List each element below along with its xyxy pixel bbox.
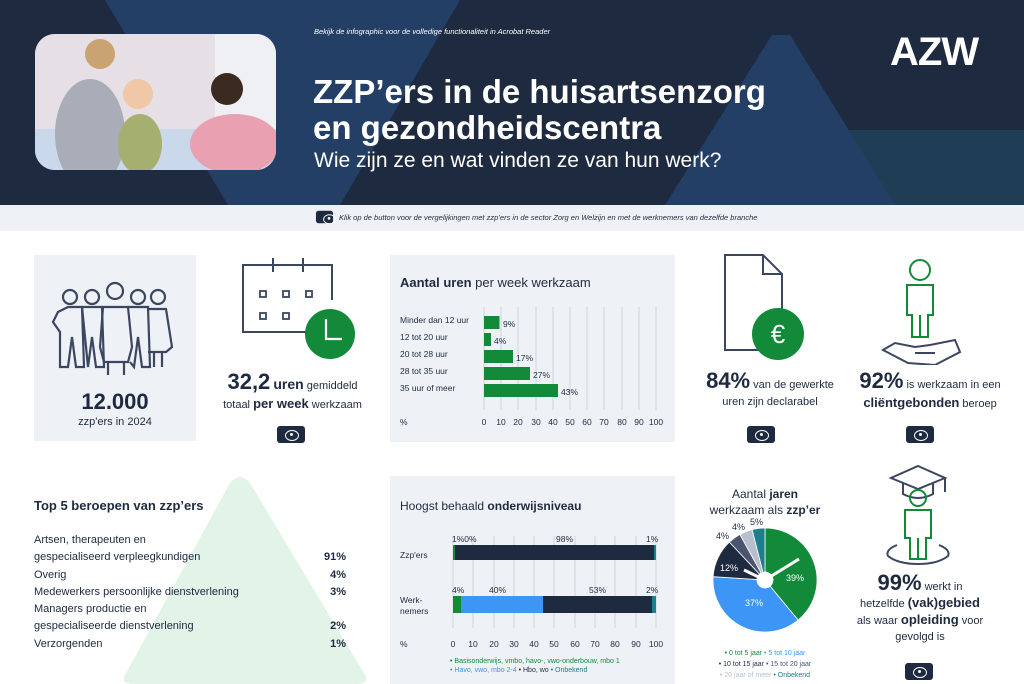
list of occupations: 91% (324, 551, 346, 563)
icon: person on hand (881, 259, 962, 365)
panel: pie chart years: 4% (716, 531, 729, 541)
panel: bar chart hours: 30 (531, 417, 541, 427)
panel: onderwijsniveau chart: 2% (646, 585, 659, 595)
panel: pie chart years: 4% (732, 522, 745, 532)
panel: bar chart hours: 28 tot 35 uur (400, 366, 448, 376)
panel: onderwijsniveau chart: 100 (649, 639, 663, 649)
stat text: als waar opleiding voor (857, 612, 983, 627)
stat text (857, 570, 983, 643)
stat text: cliëntgebonden beroep (863, 395, 997, 410)
panel: 12000 zzp'ers: zzp'ers in 2024 (78, 416, 152, 428)
eye button (906, 426, 934, 443)
panel: onderwijsniveau chart: 60 (570, 639, 580, 649)
list of occupations: Verzorgenden (34, 638, 102, 650)
panel: onderwijsniveau chart: 40 (529, 639, 539, 649)
panel: 92% clientgebonden (859, 259, 1001, 443)
panel: onderwijsniveau chart: 30 (509, 639, 519, 649)
stat text: 84% van de gewerkte (706, 368, 834, 393)
panel: onderwijsniveau chart: 90 (631, 639, 641, 649)
eye button (905, 663, 933, 680)
stat text (706, 368, 834, 408)
panel: 84% declarabel (706, 254, 834, 443)
panel: onderwijsniveau chart: 98% (556, 534, 573, 544)
panel: bar chart hours: 10 (496, 417, 506, 427)
panel: bar chart hours: 0 (482, 417, 487, 427)
panel: pie chart years: 37% (745, 598, 763, 608)
panel: bar chart hours: % (400, 417, 408, 427)
panel: bar chart hours: 90 (634, 417, 644, 427)
list of occupations: Overig (34, 569, 66, 581)
panel: bar chart hours: 70 (599, 417, 609, 427)
panel: 12000 zzp'ers (34, 255, 196, 441)
stat text: totaal per week werkzaam (223, 396, 362, 411)
panel: bar chart hours: 40 (548, 417, 558, 427)
panel: pie chart years: • 20 jaar of meer • Onbekend (720, 672, 810, 679)
stat text (859, 368, 1001, 410)
header background (0, 0, 1024, 205)
list of occupations: 4% (330, 569, 346, 581)
panel: hours per week (223, 258, 362, 443)
panel: pie chart years: Aantal jaren (732, 487, 798, 501)
panel: onderwijsniveau chart: 70 (590, 639, 600, 649)
list of occupations: Managers productie en (34, 603, 147, 615)
eye button (277, 426, 305, 443)
stat text: uren zijn declarabel (722, 396, 818, 408)
panel: pie chart years: 39% (786, 573, 804, 583)
photo (35, 34, 276, 170)
panel: bar chart hours: Minder dan 12 uur (400, 315, 469, 325)
list of occupations (34, 534, 346, 650)
panel: onderwijsniveau chart: Werk- (400, 595, 423, 605)
panel: onderwijsniveau chart: • Havo, vwo, mbo 2-4 • Hbo, wo • Onbekend (450, 667, 587, 674)
decorative green triangle (124, 477, 366, 684)
title: ZZP’ers in de huisartsenzorg (313, 73, 766, 110)
panel: top 5 beroepen: Top 5 beroepen van zzp’ers (34, 498, 204, 513)
panel: pie chart years: 12% (720, 563, 738, 573)
eye button (316, 211, 333, 223)
panel: bar chart hours: 27% (533, 370, 550, 380)
stat text (223, 369, 362, 411)
panel: bar chart hours: 20 (513, 417, 523, 427)
list of occupations: Medewerkers persoonlijke dienstverlening (34, 586, 239, 598)
top note: Bekijk de infographic voor de volledige functionaliteit in Acrobat Reader (314, 27, 550, 36)
panel: pie chart years (709, 487, 821, 679)
title (313, 73, 766, 146)
panel: pie chart years: • 0 tot 5 jaar • 5 tot 10 jaar (725, 650, 806, 657)
logo AZW: AZW (890, 30, 978, 74)
list of occupations: 1% (330, 638, 346, 650)
icon: group of people (52, 282, 174, 375)
panel: bar chart hours: 50 (565, 417, 575, 427)
panel: bar chart hours: 35 uur of meer (400, 383, 455, 393)
panel: onderwijsniveau chart: 1%0% (452, 534, 477, 544)
panel: onderwijsniveau chart (390, 476, 675, 684)
panel: onderwijsniveau chart: 0 (451, 639, 456, 649)
panel: bar chart hours: 4% (494, 336, 507, 346)
panel: onderwijsniveau chart: Zzp'ers (400, 550, 428, 560)
panel: onderwijsniveau chart: 20 (489, 639, 499, 649)
list of occupations: 3% (330, 586, 346, 598)
panel: bar chart hours: 17% (516, 353, 533, 363)
stat text: gevolgd is (895, 631, 945, 643)
eye button (747, 426, 775, 443)
panel: bar chart hours: 43% (561, 387, 578, 397)
list of occupations: gespecialiseerd verpleegkundigen (34, 551, 200, 563)
icon: calendar with clock (242, 258, 355, 359)
panel: bar chart hours: 100 (649, 417, 663, 427)
list of occupations: 2% (330, 620, 346, 632)
info band (0, 205, 1024, 231)
panel: onderwijsniveau chart: nemers (400, 606, 428, 616)
panel: onderwijsniveau chart: 40% (489, 585, 506, 595)
list of occupations: Artsen, therapeuten en (34, 534, 146, 546)
panel: bar chart hours: 80 (617, 417, 627, 427)
stat text: 99% werkt in (877, 570, 962, 595)
panel: bar chart hours: 20 tot 28 uur (400, 349, 448, 359)
panel: bar chart hours: 12 tot 20 uur (400, 332, 448, 342)
panel: onderwijsniveau chart: 80 (610, 639, 620, 649)
panel: top 5 beroepen (34, 498, 346, 650)
panel: pie chart years: 5% (750, 517, 763, 527)
panel: onderwijsniveau chart: 4% (452, 585, 465, 595)
panel: bar chart hours: Aantal uren per week werkzaam (400, 275, 591, 290)
panel: bar chart hours (390, 255, 675, 442)
icon: document with euro: € (771, 319, 786, 349)
panel: bar chart hours: 9% (503, 319, 516, 329)
stat text: hetzelfde (vak)gebied (860, 595, 980, 610)
panel: bar chart hours: 60 (582, 417, 592, 427)
panel: onderwijsniveau chart: % (400, 639, 408, 649)
title: en gezondheidscentra (313, 109, 661, 146)
panel: onderwijsniveau chart: 53% (589, 585, 606, 595)
panel: pie chart years: • 10 tot 15 jaar • 15 tot 20 jaar (719, 661, 812, 668)
info band: Klik op de button voor de vergelijkingen met zzp’ers in de sector Zorg en Welzijn en met de werknemers van dezelfde branche (339, 213, 757, 222)
panel: onderwijsniveau chart: 50 (549, 639, 559, 649)
stat text: 12.000 (81, 389, 149, 414)
list of occupations: gespecialiseerde dienstverlening (34, 620, 194, 632)
stat text: 92% is werkzaam in een (859, 368, 1001, 393)
panel: onderwijsniveau chart: • Basisonderwijs, vmbo, havo-, vwo-onderbouw, mbo 1 (450, 658, 620, 665)
subtitle: Wie zijn ze en wat vinden ze van hun werk? (314, 149, 721, 172)
panel: onderwijsniveau chart: Hoogst behaald onderwijsniveau (400, 499, 581, 513)
panel: onderwijsniveau chart: 10 (468, 639, 478, 649)
stat text: 32,2 uren gemiddeld (227, 369, 358, 394)
panel: pie chart years: werkzaam als zzp’er (709, 503, 821, 517)
panel: onderwijsniveau chart: 1% (646, 534, 659, 544)
icon: graduate (888, 464, 948, 560)
icon: document with euro (724, 254, 804, 360)
panel: 99% vakgebied (857, 464, 983, 680)
